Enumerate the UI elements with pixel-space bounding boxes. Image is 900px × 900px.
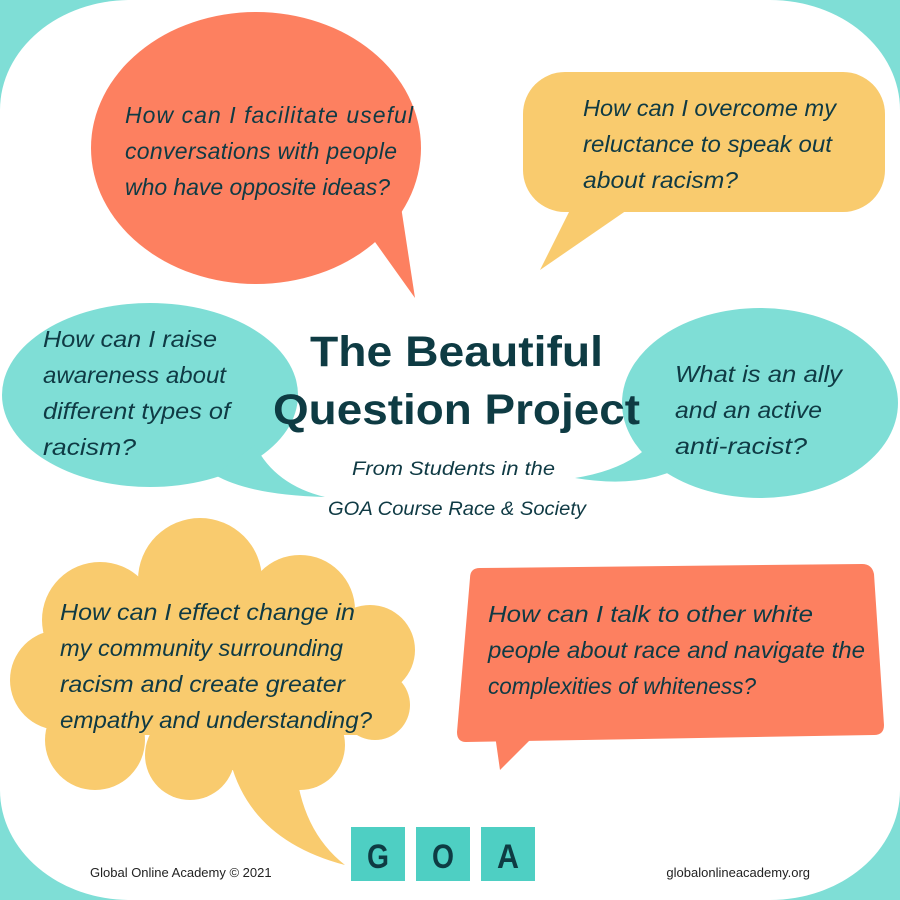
bubble: effect change cloud xyxy=(10,518,415,865)
bubble: raise awareness: different types of xyxy=(43,398,233,424)
bubble: effect change cloud: racism and create greater xyxy=(60,671,346,697)
bubble: talk to other white people: complexities of whiteness? xyxy=(488,673,756,699)
bubble: talk to other white people: people about race and navigate the xyxy=(487,637,865,663)
bubble: effect change cloud: empathy and understanding? xyxy=(60,707,372,733)
bubble: overcome reluctance xyxy=(523,72,885,270)
bubble: facilitate conversations: who have opposite ideas? xyxy=(125,174,390,200)
title: Question Project xyxy=(273,386,640,434)
title xyxy=(273,328,640,434)
bubble: facilitate conversations: How can I facilitate useful xyxy=(125,102,414,128)
title: The Beautiful xyxy=(310,328,603,376)
bubble: talk to other white people xyxy=(457,564,884,770)
subtitle: GOA Course Race & Society xyxy=(328,499,588,520)
footer right: globalonlineacademy.org xyxy=(666,865,810,880)
GOA logo: G xyxy=(367,838,389,876)
bubble: effect change cloud: How can I effect change in xyxy=(60,599,355,625)
footer left: Global Online Academy © 2021 xyxy=(90,865,272,880)
subtitle xyxy=(328,459,588,520)
bubble: what is an ally: and an active xyxy=(675,397,822,423)
bubble: raise awareness: How can I raise xyxy=(43,326,217,352)
subtitle: From Students in the xyxy=(352,459,555,480)
bubble: overcome reluctance: about racism? xyxy=(583,167,738,193)
bubble: raise awareness xyxy=(2,303,325,497)
bubble: facilitate conversations xyxy=(91,12,421,298)
bubble: effect change cloud: my community surrounding xyxy=(60,635,343,661)
GOA logo: A xyxy=(497,838,519,876)
GOA logo: O xyxy=(432,838,454,876)
bubble: what is an ally: anti-racist? xyxy=(675,433,807,459)
bubble: talk to other white people: How can I talk to other white xyxy=(488,601,813,627)
GOA logo xyxy=(351,827,535,881)
bubble: facilitate conversations: conversations with people xyxy=(125,138,397,164)
bubble: overcome reluctance: How can I overcome my xyxy=(583,95,838,121)
bubble: what is an ally: What is an ally xyxy=(675,361,844,387)
bubble: raise awareness: awareness about xyxy=(43,362,228,388)
bubble: overcome reluctance: reluctance to speak out xyxy=(583,131,834,157)
bubble: raise awareness: racism? xyxy=(43,434,136,460)
bubble: what is an ally xyxy=(575,308,898,498)
